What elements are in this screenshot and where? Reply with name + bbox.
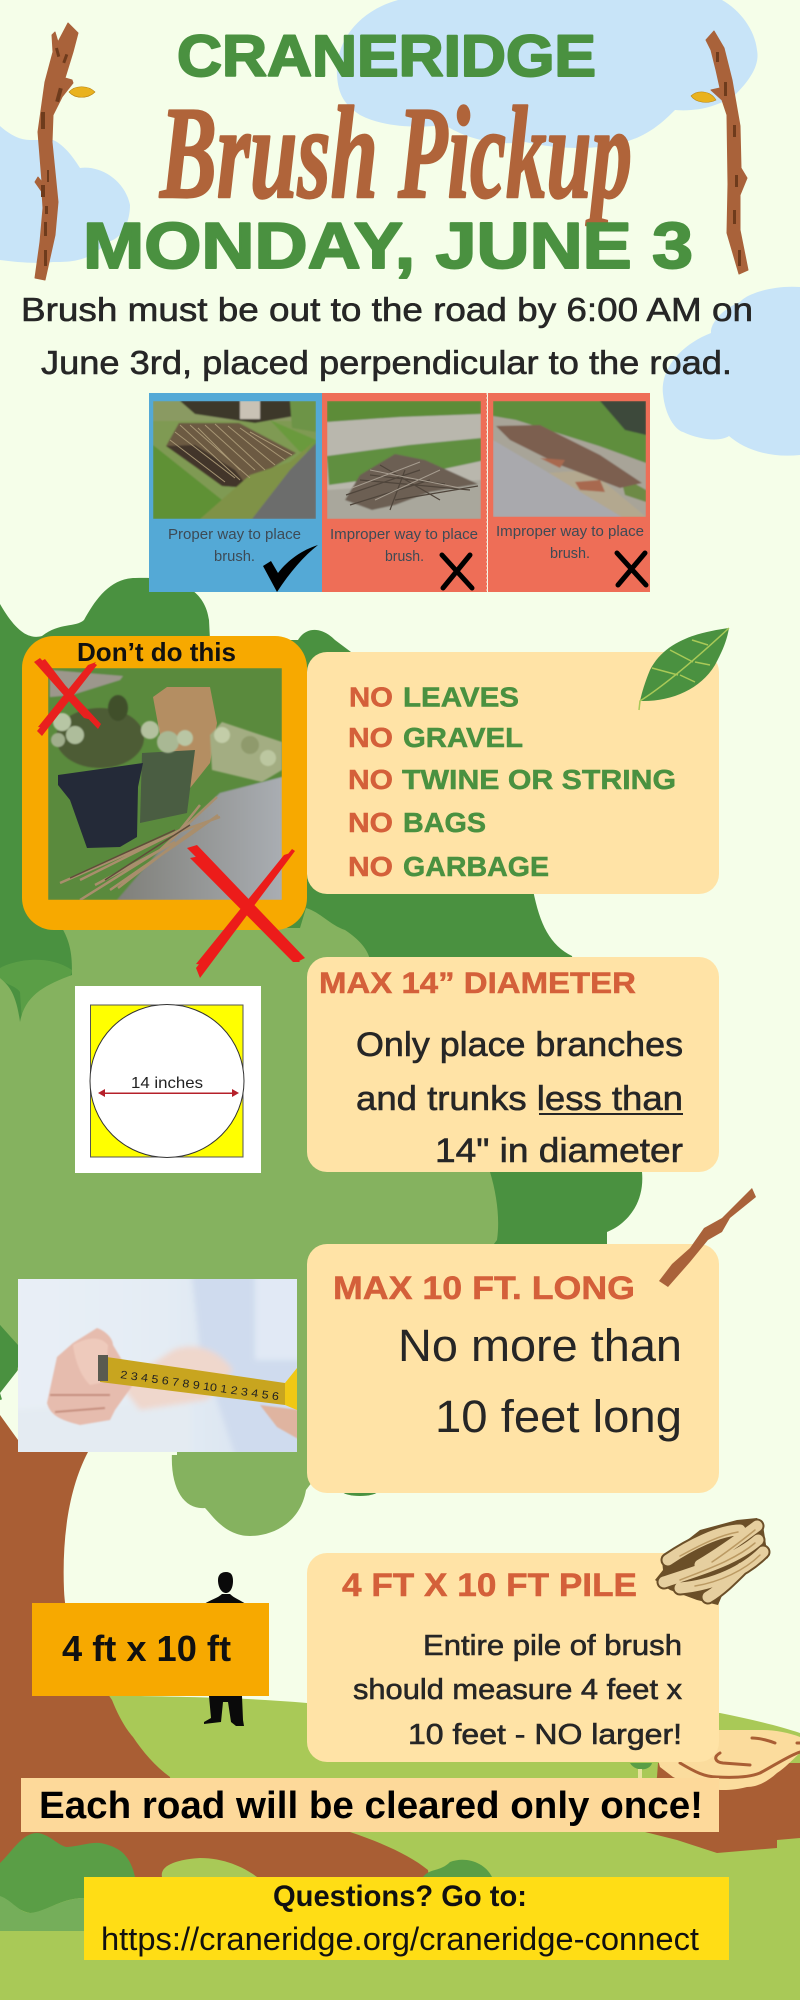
- text: pile rule: Entire pile of brush: [423, 1630, 682, 1662]
- panel: prohibited items: [307, 628, 729, 894]
- list: no items: NO: [349, 682, 393, 712]
- photo detail: tape: [100, 1356, 285, 1405]
- panel: length: [307, 1188, 756, 1493]
- panel: proper way: [149, 393, 322, 592]
- photo detail: sticks: [60, 797, 220, 900]
- grass patch: [162, 1858, 257, 1877]
- list: no items: BAGS: [403, 807, 486, 838]
- callout: questions: [84, 1877, 729, 1960]
- photo: bins and bags: [48, 668, 282, 900]
- callout: questions: https://craneridge.org/craneridge-connect: [101, 1921, 699, 1957]
- photo detail: right shrub: [210, 722, 282, 782]
- label: pile size: 4 ft x 10 ft: [62, 1628, 231, 1669]
- list: no items: NO: [348, 722, 393, 753]
- text: diameter rule: Only place branches: [356, 1026, 683, 1064]
- tree canopy: dark sliver left: [0, 1325, 18, 1392]
- photo: messy pile: [327, 401, 481, 519]
- callout: questions: Questions? Go to:: [273, 1880, 527, 1913]
- icon: check mark: [263, 545, 318, 592]
- bush: lower mid-green: [0, 1896, 84, 1931]
- panel: proper way: brush.: [214, 549, 255, 565]
- arrow: diameter: [98, 1089, 239, 1097]
- list: no items: GRAVEL: [403, 722, 523, 753]
- diagram: 14 inch circle: [75, 986, 261, 1173]
- photo detail: plants: [51, 695, 193, 768]
- sprout: [630, 1763, 652, 1778]
- diagram: 14 inch circle: 14 inches: [131, 1075, 203, 1092]
- text: length rule: No more than: [398, 1320, 682, 1371]
- intro text: [21, 291, 753, 381]
- icon: leaf: [639, 628, 729, 710]
- icon: large red cross: [187, 845, 305, 978]
- text: length rule: [398, 1320, 682, 1442]
- photo strip: placement examples: [149, 393, 650, 592]
- intro text: Brush must be out to the road by 6:00 AM on: [21, 291, 753, 328]
- cloud: top right: [337, 0, 758, 148]
- tree stump: [645, 1730, 800, 1853]
- intro text: June 3rd, placed perpendicular to the road.: [41, 344, 732, 381]
- text: pile rule: 10 feet - NO larger!: [408, 1719, 682, 1751]
- cloud: right: [663, 287, 800, 456]
- tree canopy: light green: [0, 908, 498, 1536]
- text: diameter rule: [356, 1026, 683, 1170]
- panel: proper way: Proper way to place: [168, 527, 301, 543]
- tree canopy: cream sliver left: [0, 1370, 18, 1440]
- list: no items: GARBAGE: [403, 851, 549, 882]
- icon: x mark: [617, 553, 646, 585]
- panel: improper way 1: brush.: [385, 549, 424, 565]
- list: no items: TWINE OR STRING: [402, 764, 676, 795]
- text: length rule: 10 feet long: [435, 1391, 682, 1442]
- photo detail: paper bag: [153, 687, 217, 797]
- heading: max length: MAX 10 FT. LONG: [333, 1270, 635, 1306]
- photo: tape measure: [18, 1279, 297, 1452]
- icon: log pile: [655, 1518, 768, 1605]
- label: pile size: [32, 1603, 269, 1696]
- list: no items: NO: [348, 851, 393, 882]
- panel: diameter: [307, 957, 719, 1172]
- cloud: left: [0, 126, 130, 263]
- bush: bottom left: [0, 1833, 135, 1913]
- tree trunk: [0, 1415, 430, 1885]
- callout: road cleared once: Each road will be cleared only once!: [39, 1785, 703, 1827]
- title: date: MONDAY, JUNE 3: [83, 209, 693, 282]
- tree canopy: mid green bump: [0, 960, 72, 1022]
- icon: x mark: [442, 555, 472, 588]
- text: pile rule: should measure 4 feet x: [353, 1674, 683, 1706]
- heading: pile size: 4 FT X 10 FT PILE: [342, 1567, 637, 1603]
- title: Brush Pickup: [158, 81, 632, 226]
- title: Craneridge: CRANERIDGE: [177, 24, 596, 89]
- title: Brush Pickup: Pickup: [397, 81, 632, 226]
- title: Brush Pickup: Brush: [158, 81, 378, 226]
- heading: max diameter: MAX 14” DIAMETER: [319, 967, 636, 1000]
- panel: don't do this photo: [22, 636, 307, 978]
- panel: pile size: [307, 1518, 768, 1762]
- list: no items: NO: [348, 764, 393, 795]
- tree canopy: dark green: [0, 578, 642, 1400]
- text: diameter rule: and trunks less than: [356, 1080, 683, 1118]
- photo detail: green bin: [140, 750, 195, 823]
- list: no items: LEAVES: [403, 682, 519, 712]
- panel: improper way 1: [322, 393, 487, 592]
- icon: man silhouette: [204, 1572, 246, 1726]
- text: diameter rule: 14" in diameter: [435, 1132, 683, 1170]
- panel: improper way 2: Improper way to place: [496, 524, 644, 540]
- left branch stick: [35, 23, 95, 280]
- icon: small red cross: [34, 658, 101, 736]
- tree canopy: dark sliver under panel: [342, 1486, 378, 1496]
- icon: stick: [659, 1188, 756, 1287]
- list: no items: NO: [348, 807, 393, 838]
- text: pile rule: [353, 1630, 683, 1751]
- heading: don't do this: Don’t do this: [77, 637, 236, 667]
- photo: scattered brush: [493, 401, 646, 517]
- right branch stick: [691, 31, 748, 274]
- photo: tape measure: 2 3 4 5 6 7 8 9 10 1 2 3 4 5 6: [120, 1369, 280, 1403]
- panel: improper way 2: brush.: [550, 546, 590, 562]
- trunk gap: cream: [85, 1445, 177, 1455]
- panel: improper way 1: Improper way to place: [330, 527, 478, 543]
- bush: small middle: [423, 1860, 492, 1877]
- ground: [0, 1695, 800, 2000]
- photo detail: black bin: [58, 763, 143, 848]
- list: no items: [348, 682, 676, 882]
- photo: neat brush: [153, 401, 316, 519]
- panel: improper way 2: [488, 393, 650, 592]
